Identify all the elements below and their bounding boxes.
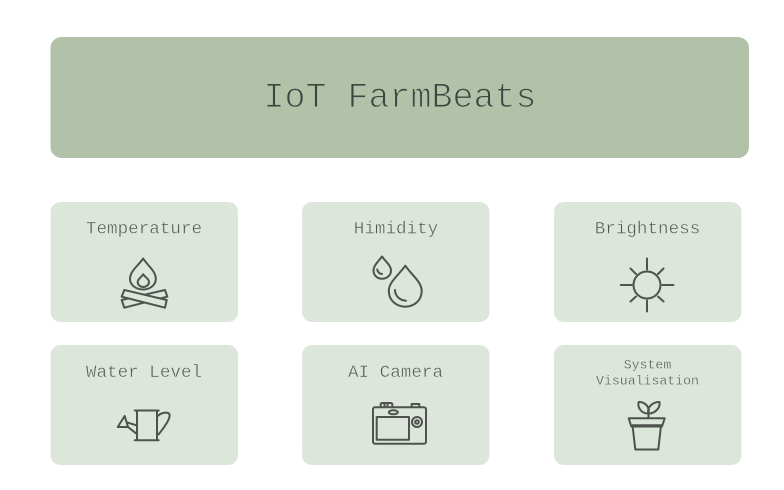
panel: temperature <box>50 202 238 322</box>
icon: potted plant <box>629 402 665 450</box>
icon: sun <box>621 258 674 312</box>
title: IoT FarmBeats <box>263 78 537 118</box>
icon: water drops <box>374 256 422 307</box>
icon: campfire <box>122 258 167 308</box>
label: system visualisation <box>596 358 699 388</box>
label: humidity: Himidity <box>354 220 438 240</box>
label: water level: Water Level <box>86 363 202 383</box>
panel: humidity <box>302 202 490 322</box>
panel: AI camera <box>302 345 490 465</box>
label: temperature: Temperature <box>86 220 202 240</box>
label: AI camera: AI Camera <box>348 363 443 383</box>
icon: watering can <box>118 410 170 440</box>
label: system visualisation: Visualisation <box>596 374 699 388</box>
header banner <box>50 37 749 158</box>
panel: water level <box>50 345 238 465</box>
label: brightness: Brightness <box>595 220 700 240</box>
panel: system visualisation <box>554 345 742 465</box>
label: system visualisation: System <box>624 358 671 372</box>
icon: camera <box>373 403 426 444</box>
panel: brightness <box>554 202 742 322</box>
